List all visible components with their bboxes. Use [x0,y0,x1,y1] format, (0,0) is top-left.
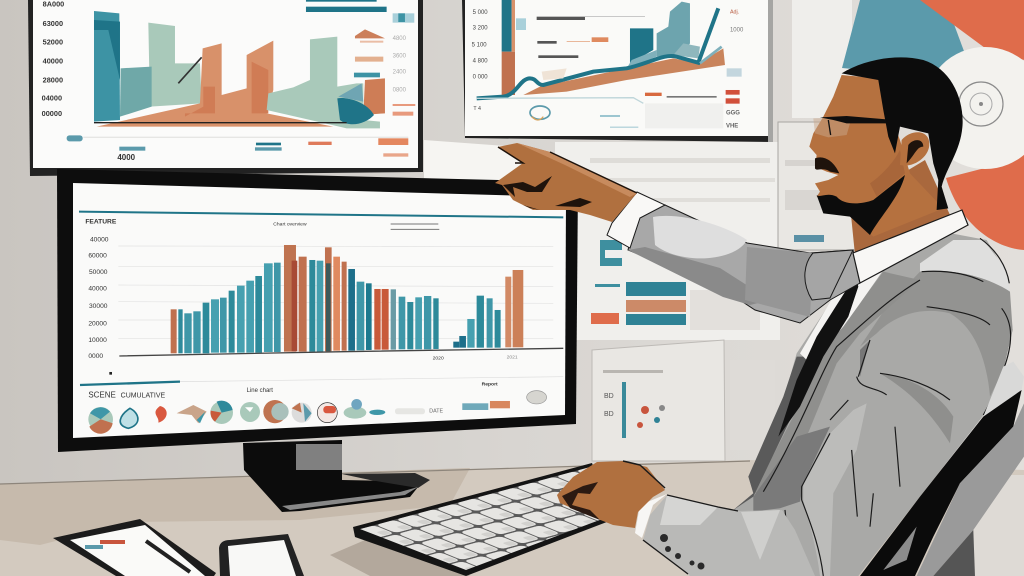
axis labels: 40000 [90,236,109,243]
axis labels: 30000 [89,303,108,310]
top right chart: 3 200 [473,25,488,31]
axis labels: Chart overview [273,221,307,227]
monitor chart area [79,212,563,434]
top right chart: 4 800 [473,59,488,65]
keyboard [330,463,612,576]
mini pie row [88,391,547,434]
top right chart: VHE [726,123,738,129]
top left chart: 63000 [43,19,63,28]
wall pie chart poster [842,0,1024,250]
top left chart: 52000 [43,38,63,47]
desk [0,460,1024,576]
bar chart [171,245,523,353]
top right monitor [462,0,773,142]
top left chart: 3600 [393,53,407,59]
ear [900,132,929,166]
monitor chart area: CUMULATIVE [121,392,165,399]
top left monitor [28,0,423,176]
background poster with small charts [555,142,780,340]
tie [778,257,858,437]
analyst figure [495,57,1024,576]
top left chart: 04000 [42,94,62,103]
top left chart: 40000 [43,56,63,65]
paper behind pointing hand [424,140,530,185]
shirt [800,263,883,363]
monitor chart area: SCENE [88,390,116,399]
face [809,57,963,237]
phone on desk [219,534,304,576]
sleeve buttons [660,534,704,570]
tablet on desk [53,519,216,576]
beard [817,175,905,235]
floor area right of chair [960,475,1024,576]
axis labels: 0000 [88,353,103,360]
neck [850,160,950,255]
lower cuff [635,494,667,538]
side paper on wall [778,122,856,250]
top right chart: 5 000 [473,10,488,16]
axis labels: FEATURE [85,218,117,225]
dark front panel [733,357,813,510]
top right chart: GGG [726,111,740,117]
axis labels: 50000 [89,269,108,276]
top left chart: 4800 [393,36,407,42]
wall white poster [792,0,852,118]
top right chart: 0 000 [473,75,488,81]
top left chart: 2400 [393,69,407,75]
glasses [813,116,887,137]
collar [853,210,968,283]
hair [842,57,963,210]
top right chart: Adj. [730,9,739,15]
top left chart: 28000 [43,76,63,85]
axis labels [85,218,518,361]
pointing hand [495,143,637,222]
main monitor [57,169,578,452]
axis labels: 20000 [88,320,107,327]
axis labels: 60000 [88,252,107,259]
lower report sheet [592,340,775,461]
jacket torso and chair [720,230,1024,576]
lower sleeve [643,495,815,576]
top left chart: 4000 [117,153,136,162]
raised sleeve [628,205,860,323]
chair [860,362,1024,576]
axis labels: 40000 [88,286,107,293]
monitor chart area: Line chart [247,388,273,394]
raised cuff [607,192,665,248]
axis labels: 10000 [88,337,107,344]
lower report sheet: BD [604,411,614,418]
top left chart: 00000 [42,109,62,118]
jacket fold lines [763,230,1011,576]
top left chart: 0800 [393,87,407,93]
top right chart: 1000 [730,27,744,33]
lower report sheet: BD [604,393,614,400]
monitor chart area: Report [482,381,498,387]
monitor stand [243,440,430,512]
top left chart [42,0,415,162]
axis labels: 2021 [507,355,518,361]
axis labels: 2020 [433,355,444,361]
top right chart: 5 100 [472,43,487,49]
top right chart [472,0,744,129]
typing hand [557,461,665,528]
monitor chart area: DATE [429,409,444,415]
top right chart: T 4 [473,106,481,112]
